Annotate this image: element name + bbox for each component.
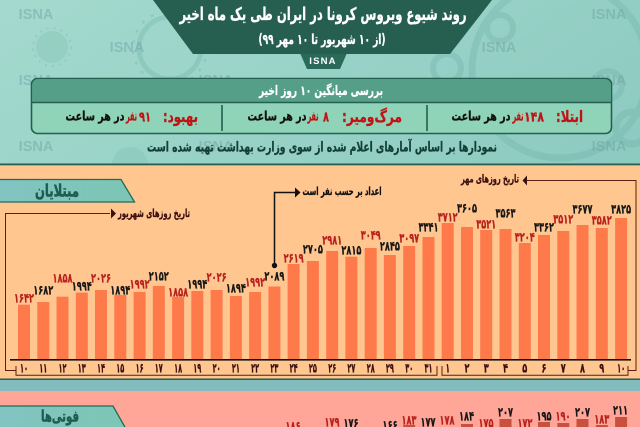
x axis day labels: ۱۳ [78, 362, 86, 376]
x axis day labels: ۲۵ [309, 362, 317, 376]
watermark: ISNA labels: ISNA [19, 7, 54, 23]
bar value labels: ۲۱۵۲ [149, 270, 169, 284]
bar value labels: ۳۶۷۷ [572, 202, 593, 218]
x axis day labels: ۱۰ [20, 362, 28, 376]
x axis day labels: ۲۲ [251, 362, 259, 376]
bar value labels: ۲۰۸۹ [264, 270, 284, 284]
x axis day labels: ۲۷ [347, 362, 355, 376]
stat: recoveries [66, 107, 198, 126]
watermark: ISNA labels: ISNA [592, 7, 627, 23]
bar value labels: ۲۰۲۶ [207, 270, 227, 286]
section tab: deaths [0, 406, 126, 427]
panel: infections chart [0, 164, 640, 380]
stat: deaths: در هر ساعت [248, 110, 307, 124]
x axis day labels: ۲۳ [270, 362, 278, 376]
bar value labels: ۳۶۰۵ [457, 202, 477, 216]
x axis day labels: ۱۶ [136, 362, 144, 376]
x axis day labels: ۵ [522, 362, 527, 376]
bars [18, 218, 627, 359]
watermark: ISNA labels [19, 7, 627, 155]
stat: recoveries: در هر ساعت [66, 110, 125, 124]
stat: infections: ۱۴۸ [524, 110, 544, 126]
stat: deaths: نفر [307, 110, 318, 124]
bar value labels: ۳۵۱۲ [553, 212, 573, 228]
subtitle: (از ۱۰ شهریور تا ۱۰ مهر ۹۹) [258, 32, 386, 48]
watermark: ISNA labels: ISNA [592, 73, 627, 89]
watermark: virus shapes [33, 0, 640, 183]
x axis day labels: ۲۰ [213, 362, 221, 376]
bar value labels: ۲۹۸۱ [322, 234, 342, 248]
watermark: ISNA labels: ISNA [19, 73, 54, 89]
bar value labels: ۳۰۴۹ [361, 228, 381, 244]
date bracket: Mehr: تاریخ روزهای مهر [460, 172, 519, 186]
stat: deaths: ۸ [323, 110, 329, 126]
x axis day labels: ۱۴ [97, 362, 105, 376]
watermark: ISNA labels: ISNA [482, 40, 517, 56]
death value labels: ۱۸۴ [459, 410, 474, 424]
death value labels: ۱۹۰ [556, 410, 570, 424]
x axis day labels: ۱۸ [174, 362, 182, 376]
date bracket: Mehr [442, 172, 636, 375]
bar value labels: ۲۸۴۵ [380, 240, 400, 254]
x axis day labels: ۱۰ [617, 362, 625, 376]
bar value labels: ۲۸۱۵ [341, 244, 361, 258]
x axis day labels: ۹ [599, 362, 604, 376]
bar value labels: ۱۸۵۸ [168, 286, 188, 300]
watermark: ISNA labels: ISNA [199, 73, 234, 89]
date bracket: Shahrivar [6, 207, 437, 375]
x axis day labels: ۱۲ [58, 362, 67, 376]
stat: infections [452, 107, 583, 126]
bar value labels: ۳۷۱۲ [438, 210, 458, 226]
watermark: ISNA labels: ISNA [199, 139, 234, 155]
death value labels: ۱۹۵ [536, 410, 552, 424]
x axis day labels: ۲۶ [328, 362, 336, 376]
x axis day labels: ۱۹ [193, 362, 201, 376]
death value labels: ۲۱۱ [613, 404, 628, 418]
x axis day labels: ۲۸ [367, 362, 375, 376]
bar value labels: ۱۹۹۲ [130, 278, 150, 292]
stat: infections: نفر [512, 110, 524, 124]
x axis day labels: ۱۵ [116, 362, 124, 376]
bar value labels: ۳۵۲۱ [476, 218, 496, 232]
bar value labels: ۳۳۴۱ [418, 220, 438, 236]
date bracket: Shahrivar: تاریخ روزهای شهریور [117, 207, 190, 220]
ISNA tag: ISNA [309, 56, 337, 67]
panel: deaths chart [0, 391, 640, 427]
x axis day labels: ۷ [561, 362, 566, 376]
x axis day labels: ۳۱ [424, 362, 432, 376]
bar value labels [14, 202, 631, 306]
x axis day labels: ۱ [446, 362, 450, 376]
death value labels: ۲۰۷ [498, 406, 513, 420]
panel: 10-day average [32, 78, 612, 134]
x axis day labels: ۱۷ [155, 362, 163, 376]
bar value labels: ۱۹۹۲ [245, 276, 265, 290]
x axis day labels: ۳ [484, 362, 489, 376]
bar value labels: ۱۶۸۲ [33, 284, 53, 298]
bar value labels: ۱۸۵۸ [52, 272, 73, 286]
stat: infections: ابتلا: [556, 107, 583, 126]
x axis day labels: ۶ [542, 362, 546, 376]
stat: deaths: مرگ‌ومیر: [342, 107, 402, 126]
bar value labels: ۱۸۹۴ [226, 282, 246, 296]
divider band [0, 380, 640, 391]
bar value labels: ۳۳۶۲ [534, 220, 554, 236]
x axis day labels: ۱۱ [39, 362, 47, 376]
section tab: deaths: فوتی‌ها [41, 408, 79, 426]
death value labels [286, 404, 628, 427]
bar value labels: ۲۰۲۶ [91, 272, 111, 286]
title banner [153, 0, 492, 69]
x axis day labels: ۸ [580, 362, 585, 376]
bar value labels: ۱۸۹۴ [110, 284, 130, 298]
watermark: ISNA labels: ISNA [592, 139, 627, 155]
section tab: infected [0, 180, 134, 202]
stat: recoveries: ۹۱ [139, 110, 151, 126]
callout arrow: numbers are in persons: اعداد بر حسب نفر است [302, 185, 382, 198]
panel heading: بررسی میانگین ۱۰ روز اخیر [258, 83, 383, 99]
x axis day labels: ۲۹ [386, 362, 394, 376]
section tab: infected: مبتلایان [35, 182, 79, 202]
stat: infections: در هر ساعت [452, 110, 511, 124]
bar value labels: ۳۵۶۳ [496, 206, 516, 222]
bar value labels: ۳۰۹۷ [399, 232, 419, 246]
bar value labels: ۲۷۰۵ [303, 242, 323, 258]
x axis day labels: ۲۱ [232, 362, 240, 376]
x axis day labels: ۴ [503, 362, 508, 376]
bar value labels: ۲۶۱۹ [284, 252, 304, 266]
x axis day labels: ۲ [464, 362, 470, 376]
callout arrow: numbers are in persons [272, 185, 382, 268]
x axis day labels: ۳۰ [405, 362, 413, 376]
x axis day labels: ۲۴ [290, 362, 298, 376]
bar value labels: ۳۲۰۴ [515, 230, 535, 246]
watermark: ISNA labels: ISNA [19, 139, 54, 155]
title: روند شیوع ویروس کرونا در ایران طی یک ماه اخیر [179, 5, 466, 25]
bar value labels: ۱۶۴۲ [14, 292, 34, 306]
stat: deaths [248, 107, 402, 126]
bar value labels: ۳۵۸۲ [592, 214, 612, 228]
death bars [403, 417, 627, 427]
death value labels: ۲۰۷ [575, 406, 590, 420]
bar value labels: ۱۹۹۴ [187, 278, 207, 292]
baseline [10, 359, 631, 361]
x axis day labels [20, 362, 625, 376]
stat: recoveries: بهبود: [163, 107, 198, 126]
stat: recoveries: نفر [126, 110, 137, 124]
bar value labels: ۱۹۹۴ [72, 280, 92, 294]
watermark: ISNA labels: ISNA [110, 40, 145, 56]
